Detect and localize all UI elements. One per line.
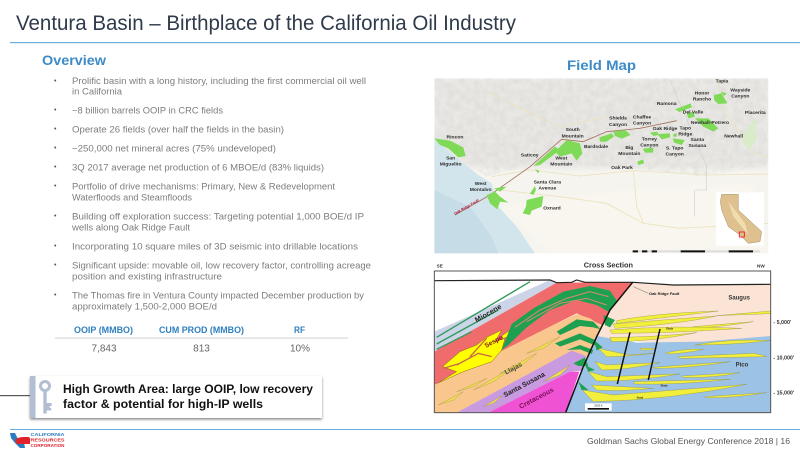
map labels: Canyon [633,121,651,127]
cross section diagram: SE [437,263,443,268]
map: field map of Ventura Basin [434,78,768,253]
scale box: 2000 ft [594,404,603,408]
map labels: Ridge [678,132,692,138]
saugus and pico sands [582,311,771,402]
map labels: Torrey [642,137,657,143]
depth labels: - 15,000' [773,390,794,396]
panel: overview bullet list: Significant upside: movable oil, low recovery factor, controlling acreage [72,260,371,270]
table: OOIP, cumulative production, recovery factor: CUM PROD (MMBO) [159,325,244,335]
map labels: Avenue [538,185,556,191]
map labels: Oxnard [543,206,561,212]
panel: overview bullet list: 3Q 2017 average net production of 6 MBOE/d (83% liquids) [72,162,324,172]
footer: Goldman Sachs Global Energy Conference 2018 | 16 [587,436,790,446]
panel: overview bullet list: • [54,145,57,152]
cross section diagram: NW [757,263,765,268]
section labels: Llajas [504,361,524,376]
layer: Llajas [434,314,602,413]
cross section title: Cross Section [584,260,633,269]
layer: Pico [566,336,771,413]
section labels: Shale [661,384,668,388]
heading: overview: Overview [42,53,107,68]
map labels: Montalvo [470,187,492,193]
table: OOIP, cumulative production, recovery factor: OOIP (MMBO) [74,325,133,335]
heading: field map: Field Map [567,57,636,73]
callout: high growth area: High Growth Area: large OOIP, low recovery [63,384,314,396]
map labels: Newhall [724,133,744,139]
panel: overview bullet list: Operate 26 fields (over half the fields in the basin) [72,124,284,134]
callout: high growth area: factor & potential for high-IP wells [63,399,263,411]
section labels: Miocene [473,302,503,324]
map labels: Tapia [716,78,729,84]
table: OOIP, cumulative production, recovery factor: 7,843 [91,344,117,354]
layer: Santa Susana [457,351,586,413]
panel: overview bullet list [54,76,371,312]
green oil sands [502,286,617,390]
table: OOIP, cumulative production, recovery factor: 813 [193,344,210,354]
section labels: Cretaceous [518,387,555,411]
map labels: Rancho [693,96,711,102]
llajas and susana sands [438,337,570,407]
panel: overview bullet list: ~250,000 net mineral acres (75% undeveloped) [72,144,276,154]
map labels: Santa Clara [534,179,561,185]
panel: overview bullet list: • [54,213,57,220]
terrain shading [434,78,768,176]
table: OOIP, cumulative production, recovery factor: 10% [290,344,310,354]
logo: California Resources Corporation: RESOURCES [30,438,64,442]
section labels: Oak Ridge Fault [649,291,680,296]
map labels: San [446,155,455,161]
section labels: Sespe [484,334,505,350]
depth labels: - 10,000' [773,356,794,362]
map labels: South [566,127,580,133]
icon: key [39,380,52,414]
map labels: Bardsdale [584,144,608,150]
panel: overview bullet list: • [54,183,57,190]
map labels: Oak Park [611,165,633,171]
cross section diagram [434,260,794,413]
section labels: Sand [637,395,644,399]
layer: Sespe [434,282,633,385]
oak ridge fault [455,121,677,215]
map labels: Mountain [562,133,584,139]
map labels: Saticoy [521,152,539,158]
roads [487,78,768,228]
sespe sands [437,330,510,384]
logo: California Resources Corporation: CALIFORNIA [30,432,65,437]
layer: Miocene [434,280,557,352]
ocean [434,138,535,253]
panel: overview bullet list: Waterfloods and Steamfloods [72,192,193,202]
inset: California locator [716,192,764,246]
map labels: Ramona [657,101,677,107]
map labels: Newhall-Potrero [691,120,729,126]
map labels: Mountain [618,151,640,157]
map labels: Canyon [609,122,627,128]
map labels: Del Valle [683,110,703,116]
panel: overview bullet list: • [54,292,57,299]
map labels: West [475,181,487,187]
title: Ventura Basin – Birthplace of the California Oil Industry [16,11,516,35]
panel: overview bullet list: Prolific basin with a long history, including the first commercial oil well [72,76,366,86]
map: field map of Ventura Basin: Oak Ridge Fault [453,198,480,216]
scale box [585,403,612,411]
panel: overview bullet list: Building off exploration success: Targeting potential 1,000 BOE/d IP [72,212,364,222]
panel: overview bullet list: Portfolio of drive mechanisms: Primary, New & Redevelopment [72,182,336,192]
map labels: Wayside [730,87,751,93]
map labels: Rincon [447,135,463,141]
section labels: Santa Susana [503,371,546,399]
panel: overview bullet list: • [54,262,57,269]
depth labels [773,320,794,396]
panel: overview bullet list: • [54,107,57,114]
map labels: Canyon [640,142,658,148]
table: OOIP, cumulative production, recovery factor [55,325,348,354]
miocene streaks [437,282,530,349]
table: OOIP, cumulative production, recovery factor: RF [294,325,305,335]
section labels [473,291,751,411]
layer: Saugus [597,282,771,345]
map labels: Big [625,145,633,151]
panel: overview bullet list: Incorporating 10 square miles of 3D seismic into drillable locations [72,242,359,252]
scale bar [633,250,760,252]
oil fields [434,92,727,215]
layer: Cretaceous [488,372,579,413]
surface line [434,280,771,285]
map labels: Susana [688,143,706,149]
frame [434,271,771,413]
panel: overview bullet list: position and existing infrastructure [72,272,222,282]
map labels: West [555,156,568,162]
panel: overview bullet list: • [54,243,57,250]
map labels: Mountain [550,162,572,168]
panel: overview bullet list: The Thomas fire in Ventura County impacted December production by [72,290,365,300]
panel: overview bullet list: approximately 1,500-2,000 BOE/d [72,302,217,312]
depth labels: - 5,000' [773,320,791,326]
section labels: Shale [666,326,674,330]
panel: overview bullet list: • [54,78,57,85]
map labels: Placerita [745,110,766,116]
panel: overview bullet list: • [54,126,57,133]
logo: California Resources Corporation: CORPORATION [30,443,65,448]
map labels: Canyon [666,151,684,157]
fault [566,282,633,413]
map labels: Santa [691,137,704,143]
panel: overview bullet list: in California [72,86,122,96]
map labels: Tapo [680,126,691,132]
map labels: Honor [695,90,709,96]
map labels: S. Tapo [666,145,683,151]
section labels: Saugus [728,295,751,301]
logo: California Resources Corporation [10,432,65,448]
map labels [440,78,766,212]
map labels: Canyon [731,94,749,100]
map labels: Chaffee [633,115,651,121]
map labels: Miguelito [440,162,462,168]
footer [10,429,800,448]
section labels: Pico [736,362,749,368]
panel: overview bullet list: ~8 billion barrels OOIP in CRC fields [72,106,224,116]
map labels: Oak Ridge [653,126,678,132]
panel: overview bullet list: wells along Oak Ridge Fault [71,222,191,232]
map labels: Shields [609,116,627,122]
panel: overview bullet list: • [54,164,57,171]
callout: high growth area [0,376,322,418]
